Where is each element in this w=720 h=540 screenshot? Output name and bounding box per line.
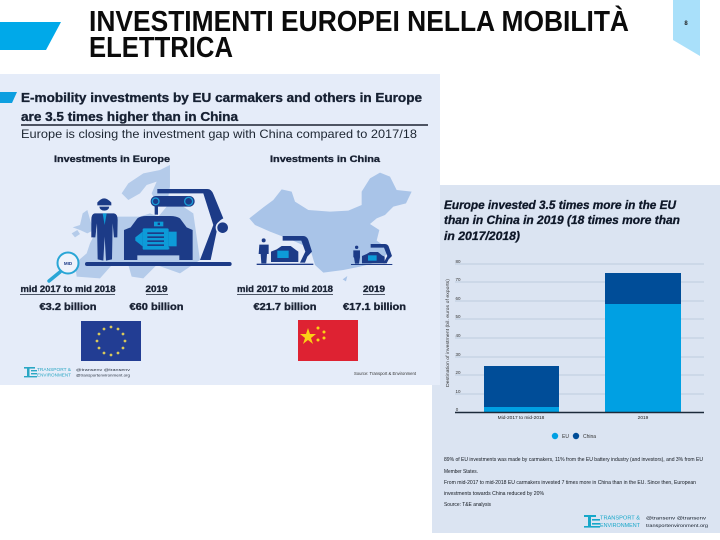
bar chart: 40: [455, 333, 461, 338]
logo: Transport & Environment small: ENVIRONMENT: [37, 372, 71, 378]
bar chart: 70: [455, 277, 461, 282]
labels: China periods and amounts: mid 2017 to mid 2018: [237, 284, 333, 294]
chart heading: than in China in 2019 (18 times more than: [444, 213, 680, 227]
icon: magnifier: [49, 252, 78, 281]
chart notes: investments towards China reduced by 20%: [444, 491, 544, 497]
bar chart: 20: [455, 370, 461, 375]
icon: China flag: [298, 320, 358, 361]
heading: investments in Europe: Investments in Europe: [54, 154, 170, 165]
chart heading: in 2017/2018): [444, 229, 520, 243]
heading: investments in China: Investments in China: [270, 154, 381, 165]
labels: China periods and amounts: 2019: [363, 284, 385, 294]
chart notes: From mid-2017 to mid-2018 EU carmakers invested 7 times more in China than in the EU. Since then, European: [444, 480, 696, 486]
logo: Transport & Environment small: TRANSPORT &: [37, 367, 72, 373]
bar chart: [445, 259, 704, 421]
logo: Transport & Environment: ENVIRONMENT: [600, 523, 641, 529]
bar chart: 60: [455, 296, 461, 301]
logo: Transport & Environment small: @transenv @transenv: [76, 368, 130, 372]
page number tab: [673, 0, 700, 56]
icon: car with motor: [124, 216, 193, 260]
chart legend: [552, 433, 596, 440]
icon: EU flag: [81, 321, 141, 361]
panel subheading: Europe is closing the investment gap with China compared to 2017/18: [21, 127, 417, 141]
page number tab: 8: [684, 21, 688, 27]
logo: Transport & Environment: [584, 515, 709, 529]
icon: title chevron: [0, 22, 61, 50]
icon: worker and factory 2017: [257, 236, 313, 265]
chart notes: Source: T&E analysis: [444, 502, 491, 508]
chart legend: China: [583, 434, 596, 440]
bar chart: 2019: [638, 415, 649, 421]
labels: Europe periods and amounts: mid 2017 to mid 2018: [20, 284, 115, 294]
panel heading: E-mobility investments by EU carmakers and others in Europe: [21, 90, 422, 105]
labels: China periods and amounts: [237, 284, 406, 313]
panel heading: [21, 90, 422, 124]
title: INVESTIMENTI EUROPEI NELLA MOBILITÀ: [89, 6, 629, 38]
bar chart: Mid-2017 to mid-2018: [498, 415, 545, 421]
labels: Europe periods and amounts: 2019: [146, 284, 168, 294]
logo: Transport & Environment: transportenvironment.org: [646, 523, 709, 528]
chart heading: Europe invested 3.5 times more in the EU: [444, 198, 677, 212]
bar chart: 30: [455, 352, 461, 357]
logo: Transport & Environment small: @transportenvironment.org: [76, 374, 130, 378]
logo: Transport & Environment: TRANSPORT &: [600, 516, 640, 522]
chart notes: [444, 457, 703, 508]
panel heading: are 3.5 times higher than in China: [21, 109, 239, 124]
title: [89, 6, 629, 64]
bar chart: 10: [455, 389, 461, 394]
icon: panel chevron: [0, 92, 17, 103]
chart heading: [444, 198, 680, 243]
bar chart: Destination of investment (bil. euros of exports): [445, 278, 450, 387]
logo: Transport & Environment: @transenv @transenv: [646, 516, 707, 520]
icon: worker and factory 2019: [351, 244, 392, 265]
labels: Europe periods and amounts: €60 billion: [130, 302, 184, 313]
panel: chart investments: [432, 185, 720, 533]
bar chart: 80: [455, 259, 461, 264]
logo: Transport & Environment small: [24, 367, 130, 378]
chart notes: Member States.: [444, 469, 478, 475]
map: China: [249, 173, 412, 281]
labels: Europe periods and amounts: €3.2 billion: [40, 302, 96, 313]
icon: worker: [91, 198, 118, 261]
bar chart: 0: [456, 407, 459, 412]
floor line: [85, 262, 232, 266]
icon: robot arm: [151, 189, 230, 260]
title: ELETTRICA: [89, 32, 233, 64]
bar chart: 50: [455, 314, 461, 319]
panel: investments map: [0, 74, 440, 385]
labels: Europe periods and amounts: [20, 284, 184, 313]
icon: magnifier: MID: [64, 261, 73, 266]
labels: China periods and amounts: €17.1 billion: [343, 302, 406, 313]
map: Europe: [72, 165, 200, 278]
labels: China periods and amounts: €21.7 billion: [254, 302, 316, 313]
chart legend: EU: [562, 434, 569, 440]
illustration: worker, car and robot arm: [85, 189, 232, 266]
source note: Source: Transport & Environment: [354, 371, 417, 376]
